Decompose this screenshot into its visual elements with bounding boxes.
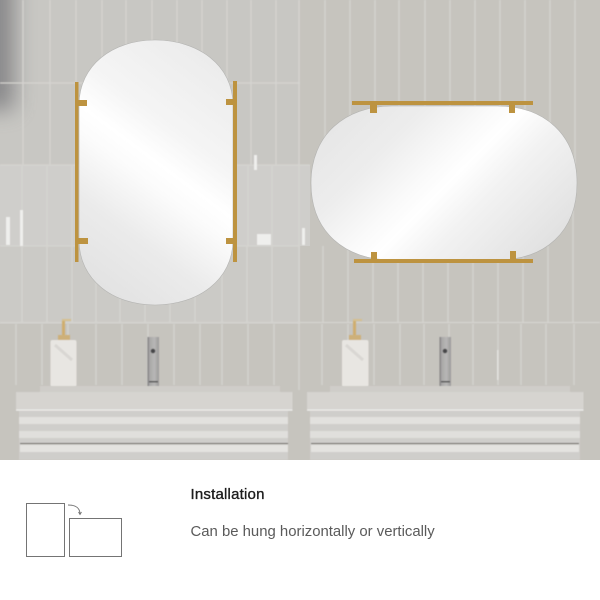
left faucet bbox=[148, 337, 159, 387]
gold rails bbox=[75, 81, 237, 262]
left vanity bbox=[16, 386, 292, 460]
heading: Installation bbox=[190, 486, 265, 503]
wall tiles bbox=[0, 0, 600, 460]
description text: Can be hung horizontally or vertically bbox=[190, 524, 435, 540]
right vanity bbox=[307, 386, 584, 460]
horizontal mirror bbox=[311, 101, 577, 263]
product scene: two mirrors over vanities bbox=[0, 0, 600, 460]
left soap dispenser bbox=[50, 319, 76, 387]
gold rails bbox=[352, 101, 533, 263]
vertical mirror bbox=[75, 40, 237, 305]
right faucet bbox=[440, 337, 451, 387]
right soap dispenser bbox=[342, 319, 368, 387]
icon: rotate portrait to landscape bbox=[26, 503, 122, 557]
